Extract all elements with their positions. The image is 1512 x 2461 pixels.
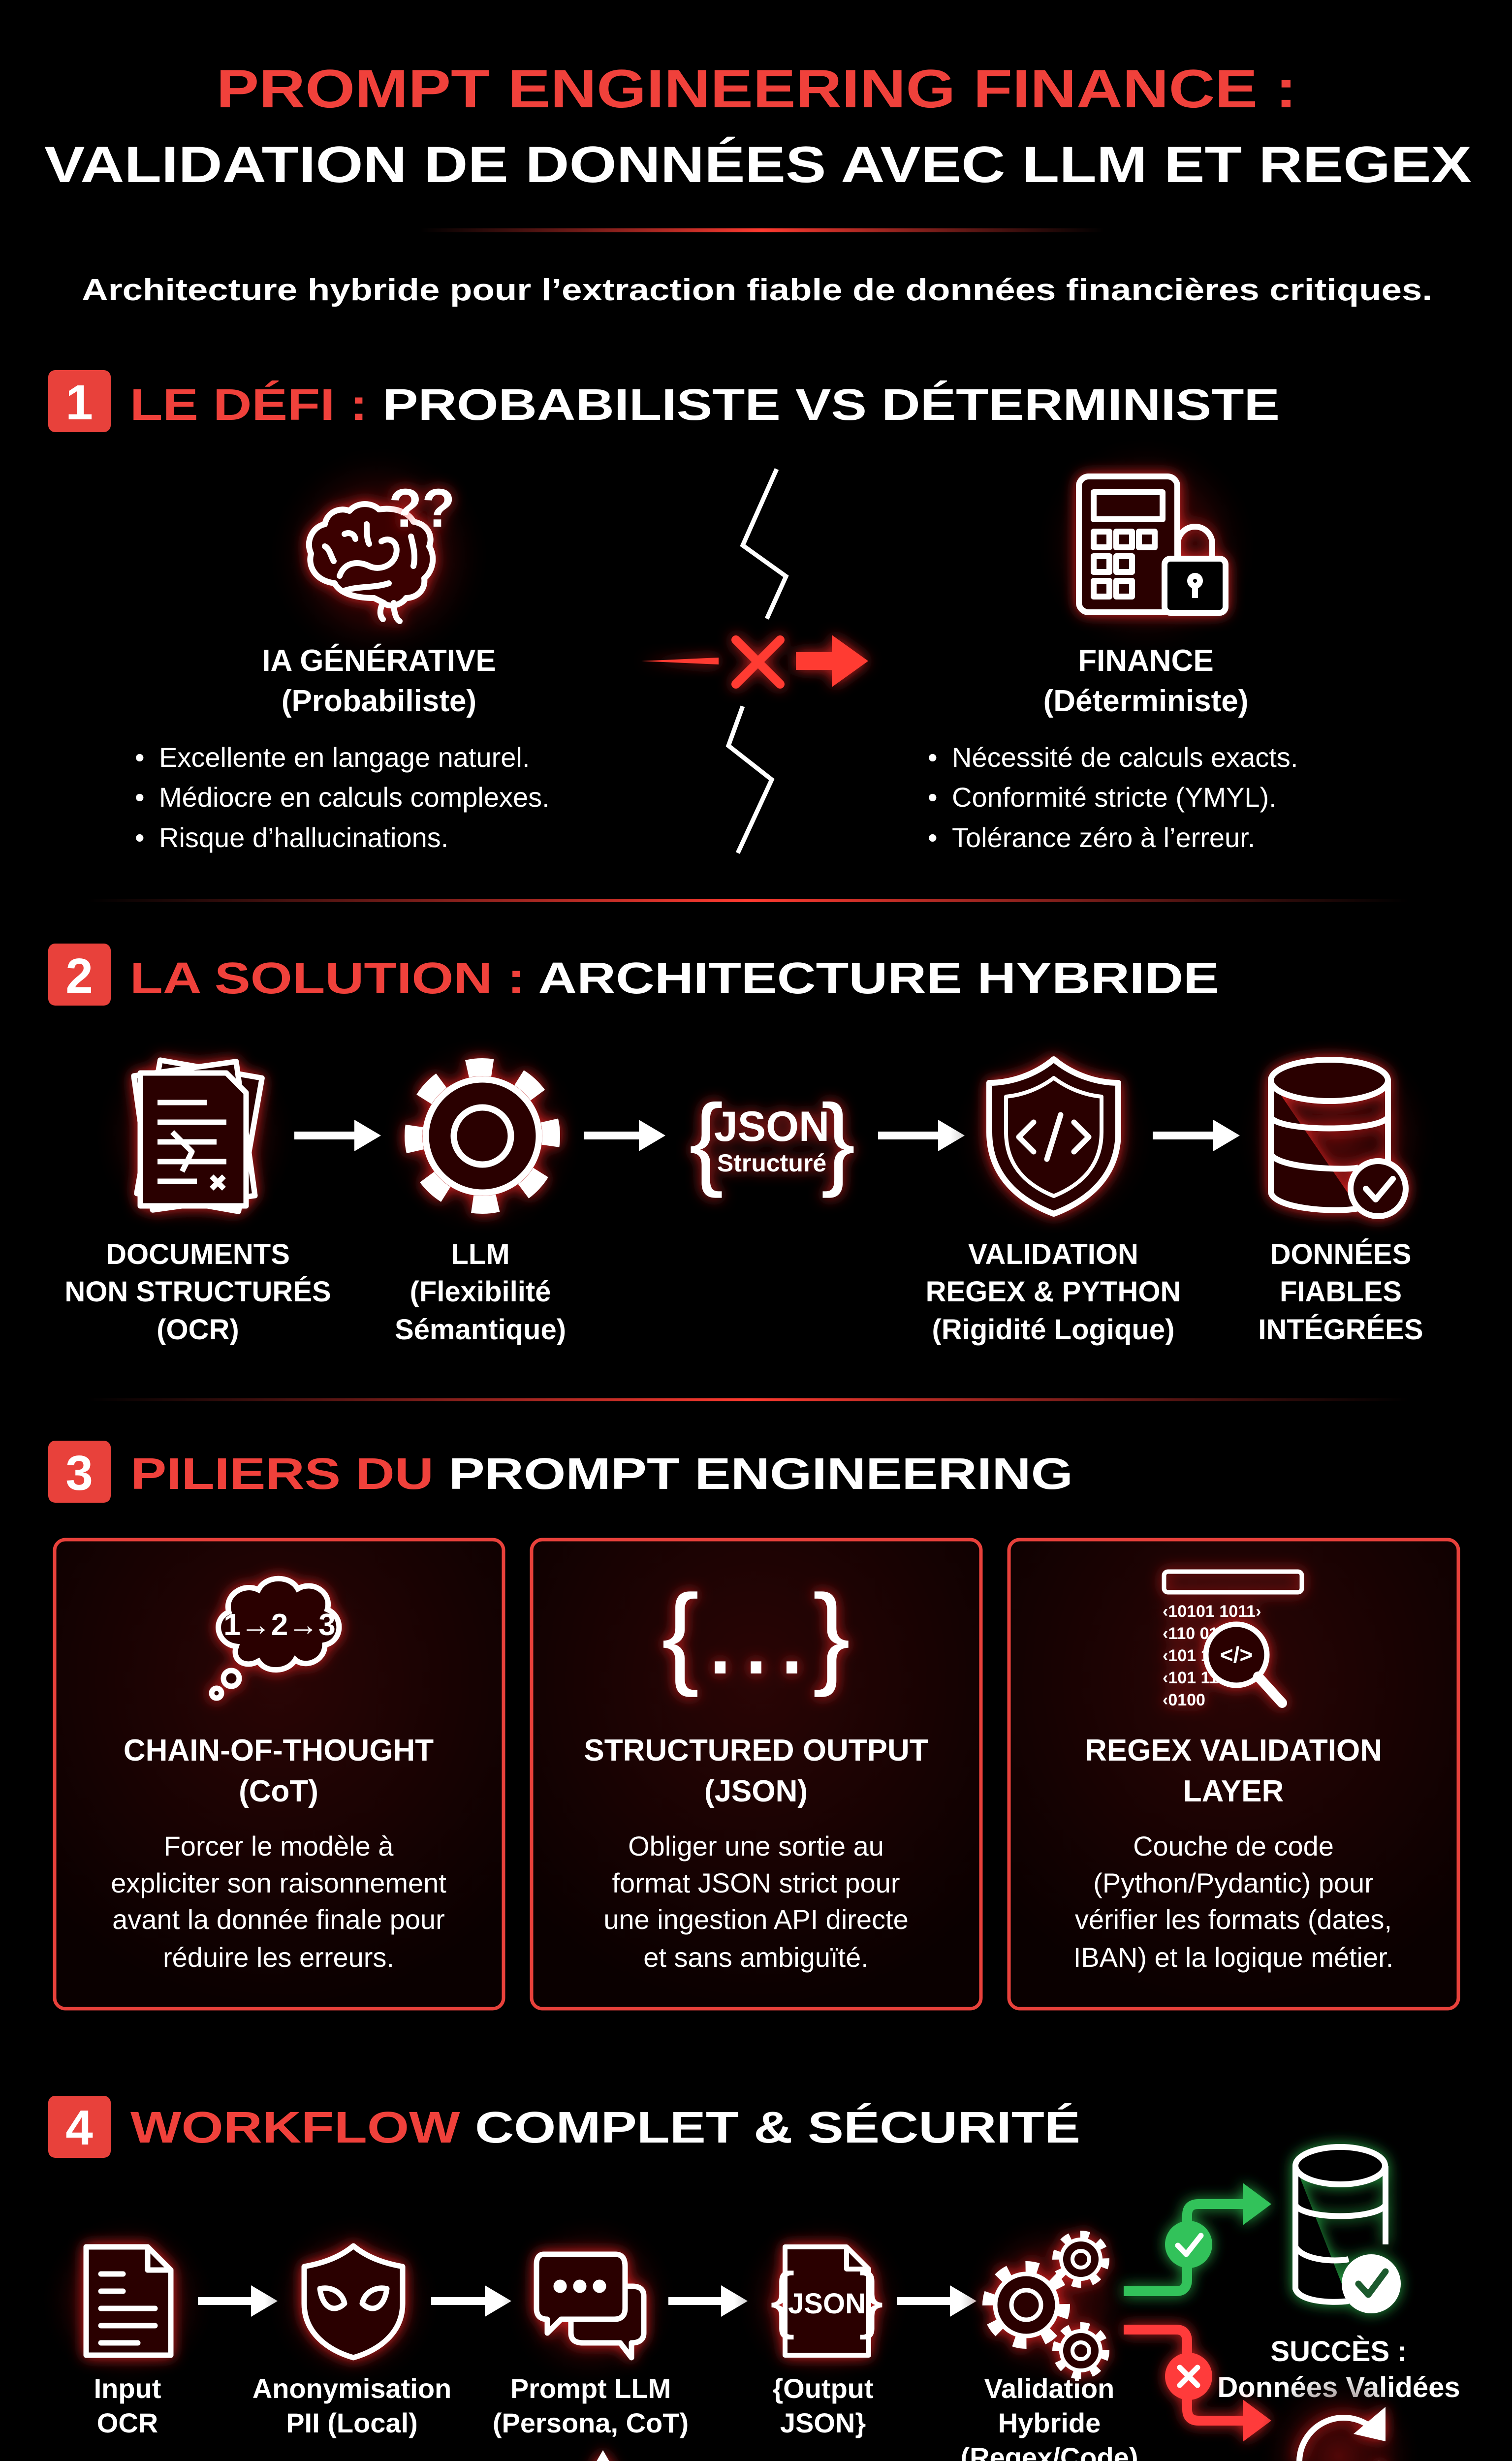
title: VALIDATION DE DONNÉES AVEC LLM ET REGEX: [44, 136, 1472, 193]
label: finance: (Déterministe): [1043, 684, 1248, 718]
bullets left: Médiocre en calculs complexes.: [159, 782, 550, 813]
icon: code magnifier: [1163, 1572, 1302, 1709]
panel: chain of thought: Forcer le modèle à: [164, 1830, 394, 1862]
section 4 heading: WORKFLOW COMPLET & SÉCURITÉ: [130, 2103, 1080, 2152]
icon: JSON structure: Structuré: [717, 1149, 826, 1177]
bullets right: •: [928, 822, 938, 853]
icon: code magnifier: ‹101 11›: [1163, 1646, 1224, 1665]
labels: workflow: OCR: [97, 2407, 158, 2438]
labels: architecture: Sémantique): [395, 1314, 566, 1346]
bullets right: •: [928, 742, 938, 773]
section 1 heading: [48, 370, 1280, 432]
icon: lightning split: [728, 469, 786, 853]
arrow: [878, 1120, 965, 1151]
icon: calculator with lock: [1034, 433, 1260, 660]
icon: input document: [39, 2212, 217, 2390]
label: IA generative: IA GÉNÉRATIVE: [262, 644, 496, 678]
arrow: failure path: [1124, 2330, 1271, 2442]
bullets right: [928, 742, 1298, 853]
title: [44, 59, 1472, 193]
panel: structured output: format JSON strict pour: [612, 1867, 900, 1898]
labels: workflow: Anonymisation: [252, 2373, 451, 2404]
labels: architecture: INTÉGRÉES: [1258, 1314, 1423, 1346]
panel: regex validation: vérifier les formats (dates,: [1075, 1904, 1392, 1935]
panel: regex validation: IBAN) et la logique métier.: [1073, 1942, 1393, 1973]
section 4 heading: [48, 2096, 1080, 2158]
labels: workflow: Validation: [984, 2373, 1114, 2404]
labels: workflow: Hybride: [998, 2407, 1101, 2438]
arrow: [294, 1120, 381, 1151]
icon: code magnifier: ‹10101 1011›: [1163, 1602, 1261, 1621]
icon: JSON structure: [689, 1083, 855, 1199]
icon: code magnifier: ‹101 11›: [1163, 1669, 1224, 1687]
icon: code magnifier: ‹0100: [1163, 1691, 1205, 1709]
labels: architecture: FIABLES: [1280, 1276, 1402, 1308]
panel: chain of thought: avant la donnée finale pour: [112, 1904, 445, 1935]
icon: gear: [379, 1033, 586, 1239]
arrow: [431, 2285, 511, 2317]
panel: regex validation: REGEX VALIDATION: [1085, 1734, 1382, 1767]
section 4 heading: 4: [65, 2100, 93, 2155]
label: success: Données Validées: [1217, 2371, 1460, 2403]
panel: chain of thought: CHAIN-OF-THOUGHT: [124, 1734, 434, 1767]
bullets right: Conformité stricte (YMYL).: [952, 782, 1277, 813]
icon: JSON document: }: [859, 2257, 883, 2340]
section 3 heading: [48, 1441, 1073, 1503]
icon: gears: [961, 2212, 1138, 2390]
labels: architecture: [64, 1238, 1423, 1346]
labels: architecture: VALIDATION: [968, 1238, 1138, 1270]
section 1 heading: 1: [65, 375, 93, 430]
title: PROMPT ENGINEERING FINANCE :: [217, 59, 1296, 119]
label: success: [1217, 2335, 1460, 2403]
arrow: return loop: [588, 2450, 1214, 2461]
panel: structured output: et sans ambiguïté.: [643, 1942, 869, 1973]
label: IA generative: (Probabiliste): [282, 684, 476, 718]
bullets left: [135, 742, 550, 853]
icon: JSON structure: {: [689, 1083, 724, 1199]
icon: shield code: [950, 1033, 1157, 1239]
panel: regex validation: LAYER: [1183, 1774, 1284, 1808]
labels: workflow: JSON}: [780, 2407, 866, 2438]
labels: workflow: Input: [94, 2373, 161, 2404]
icon: documents: [92, 1033, 299, 1239]
icon: JSON document: [734, 2212, 912, 2390]
icon: brain: ??: [389, 478, 455, 538]
icon: JSON structure: }: [821, 1083, 855, 1199]
icon: braces: {…}: [662, 1571, 850, 1698]
labels: architecture: REGEX & PYTHON: [926, 1276, 1181, 1308]
icon: JSON document: JSON: [788, 2288, 866, 2320]
section 3 heading: PILIERS DU PROMPT ENGINEERING: [130, 1450, 1073, 1499]
icon: thought cloud: 1→2→3: [223, 1608, 336, 1642]
icon: code magnifier: ‹110 01›: [1163, 1624, 1224, 1643]
icon: anonymisation mask shield: [265, 2212, 442, 2390]
label: finance: FINANCE: [1078, 644, 1214, 678]
panel: structured output: une ingestion API directe: [603, 1904, 909, 1935]
icon: chat bubbles: [502, 2212, 679, 2390]
labels: workflow: PII (Local): [286, 2407, 418, 2438]
arrow: [584, 1120, 665, 1151]
bullets right: Tolérance zéro à l’erreur.: [952, 822, 1255, 853]
panel: chain of thought: expliciter son raisonnement: [111, 1867, 446, 1898]
section 2 heading: LA SOLUTION : ARCHITECTURE HYBRIDE: [130, 954, 1219, 1003]
icon: brain: [266, 443, 492, 669]
panel: chain of thought: (CoT): [239, 1774, 318, 1808]
section 1 heading: LE DÉFI : PROBABILISTE VS DÉTERMINISTE: [130, 380, 1280, 430]
panel: chain of thought: [55, 1540, 504, 2009]
section 2 heading: 2: [65, 948, 93, 1004]
panel: chain of thought: réduire les erreurs.: [163, 1942, 394, 1973]
bullets left: Risque d’hallucinations.: [159, 822, 448, 853]
bullets left: •: [135, 822, 145, 853]
arrow: [1153, 1120, 1240, 1151]
icon: success database: [1295, 2147, 1401, 2313]
bullets right: •: [928, 782, 938, 813]
label: IA generative: [262, 644, 496, 718]
arrow: [668, 2285, 748, 2317]
labels: workflow: (Persona, CoT): [493, 2407, 689, 2438]
labels: workflow: {Output: [772, 2373, 874, 2404]
subtitle: Architecture hybride pour l’extraction fiable de données financières critiques.: [82, 273, 1432, 307]
arrow: blocked: [641, 635, 868, 687]
labels: workflow: [94, 2373, 1138, 2461]
bullets left: •: [135, 742, 145, 773]
bullets right: Nécessité de calculs exacts.: [952, 742, 1298, 773]
panel: regex validation: [1009, 1540, 1458, 2009]
arrow: [897, 2285, 976, 2317]
panel: structured output: STRUCTURED OUTPUT: [584, 1734, 928, 1767]
arrow: [198, 2285, 278, 2317]
label: finance: [1043, 644, 1248, 718]
labels: architecture: (Rigidité Logique): [932, 1314, 1174, 1346]
icon: JSON structure: JSON: [714, 1103, 829, 1150]
labels: workflow: Prompt LLM: [510, 2373, 671, 2404]
panel: regex validation: (Python/Pydantic) pour: [1093, 1867, 1374, 1898]
bullets left: Excellente en langage naturel.: [159, 742, 530, 773]
icon: code magnifier: </>: [1220, 1642, 1253, 1668]
section 2 heading: [48, 944, 1219, 1006]
labels: architecture: DONNÉES: [1270, 1238, 1411, 1270]
panel: structured output: Obliger une sortie au: [628, 1830, 884, 1862]
icon: thought cloud: [212, 1578, 339, 1698]
label: success: SUCCÈS :: [1270, 2335, 1407, 2367]
icon: database check: [1233, 1033, 1440, 1239]
labels: architecture: NON STRUCTURÉS: [64, 1276, 331, 1308]
labels: architecture: (Flexibilité: [410, 1276, 551, 1308]
panel: structured output: (JSON): [704, 1774, 808, 1808]
icon: refresh loop: [1255, 2372, 1422, 2461]
panel: structured output: [532, 1540, 981, 2009]
section 3 heading: 3: [65, 1446, 93, 1501]
labels: architecture: LLM: [451, 1238, 510, 1270]
icon: JSON document: {: [770, 2257, 795, 2340]
labels: architecture: DOCUMENTS: [106, 1238, 290, 1270]
panel: regex validation: Couche de code: [1133, 1830, 1334, 1862]
bullets left: •: [135, 782, 145, 813]
labels: architecture: (OCR): [157, 1314, 239, 1346]
arrow: success path: [1124, 2183, 1271, 2291]
